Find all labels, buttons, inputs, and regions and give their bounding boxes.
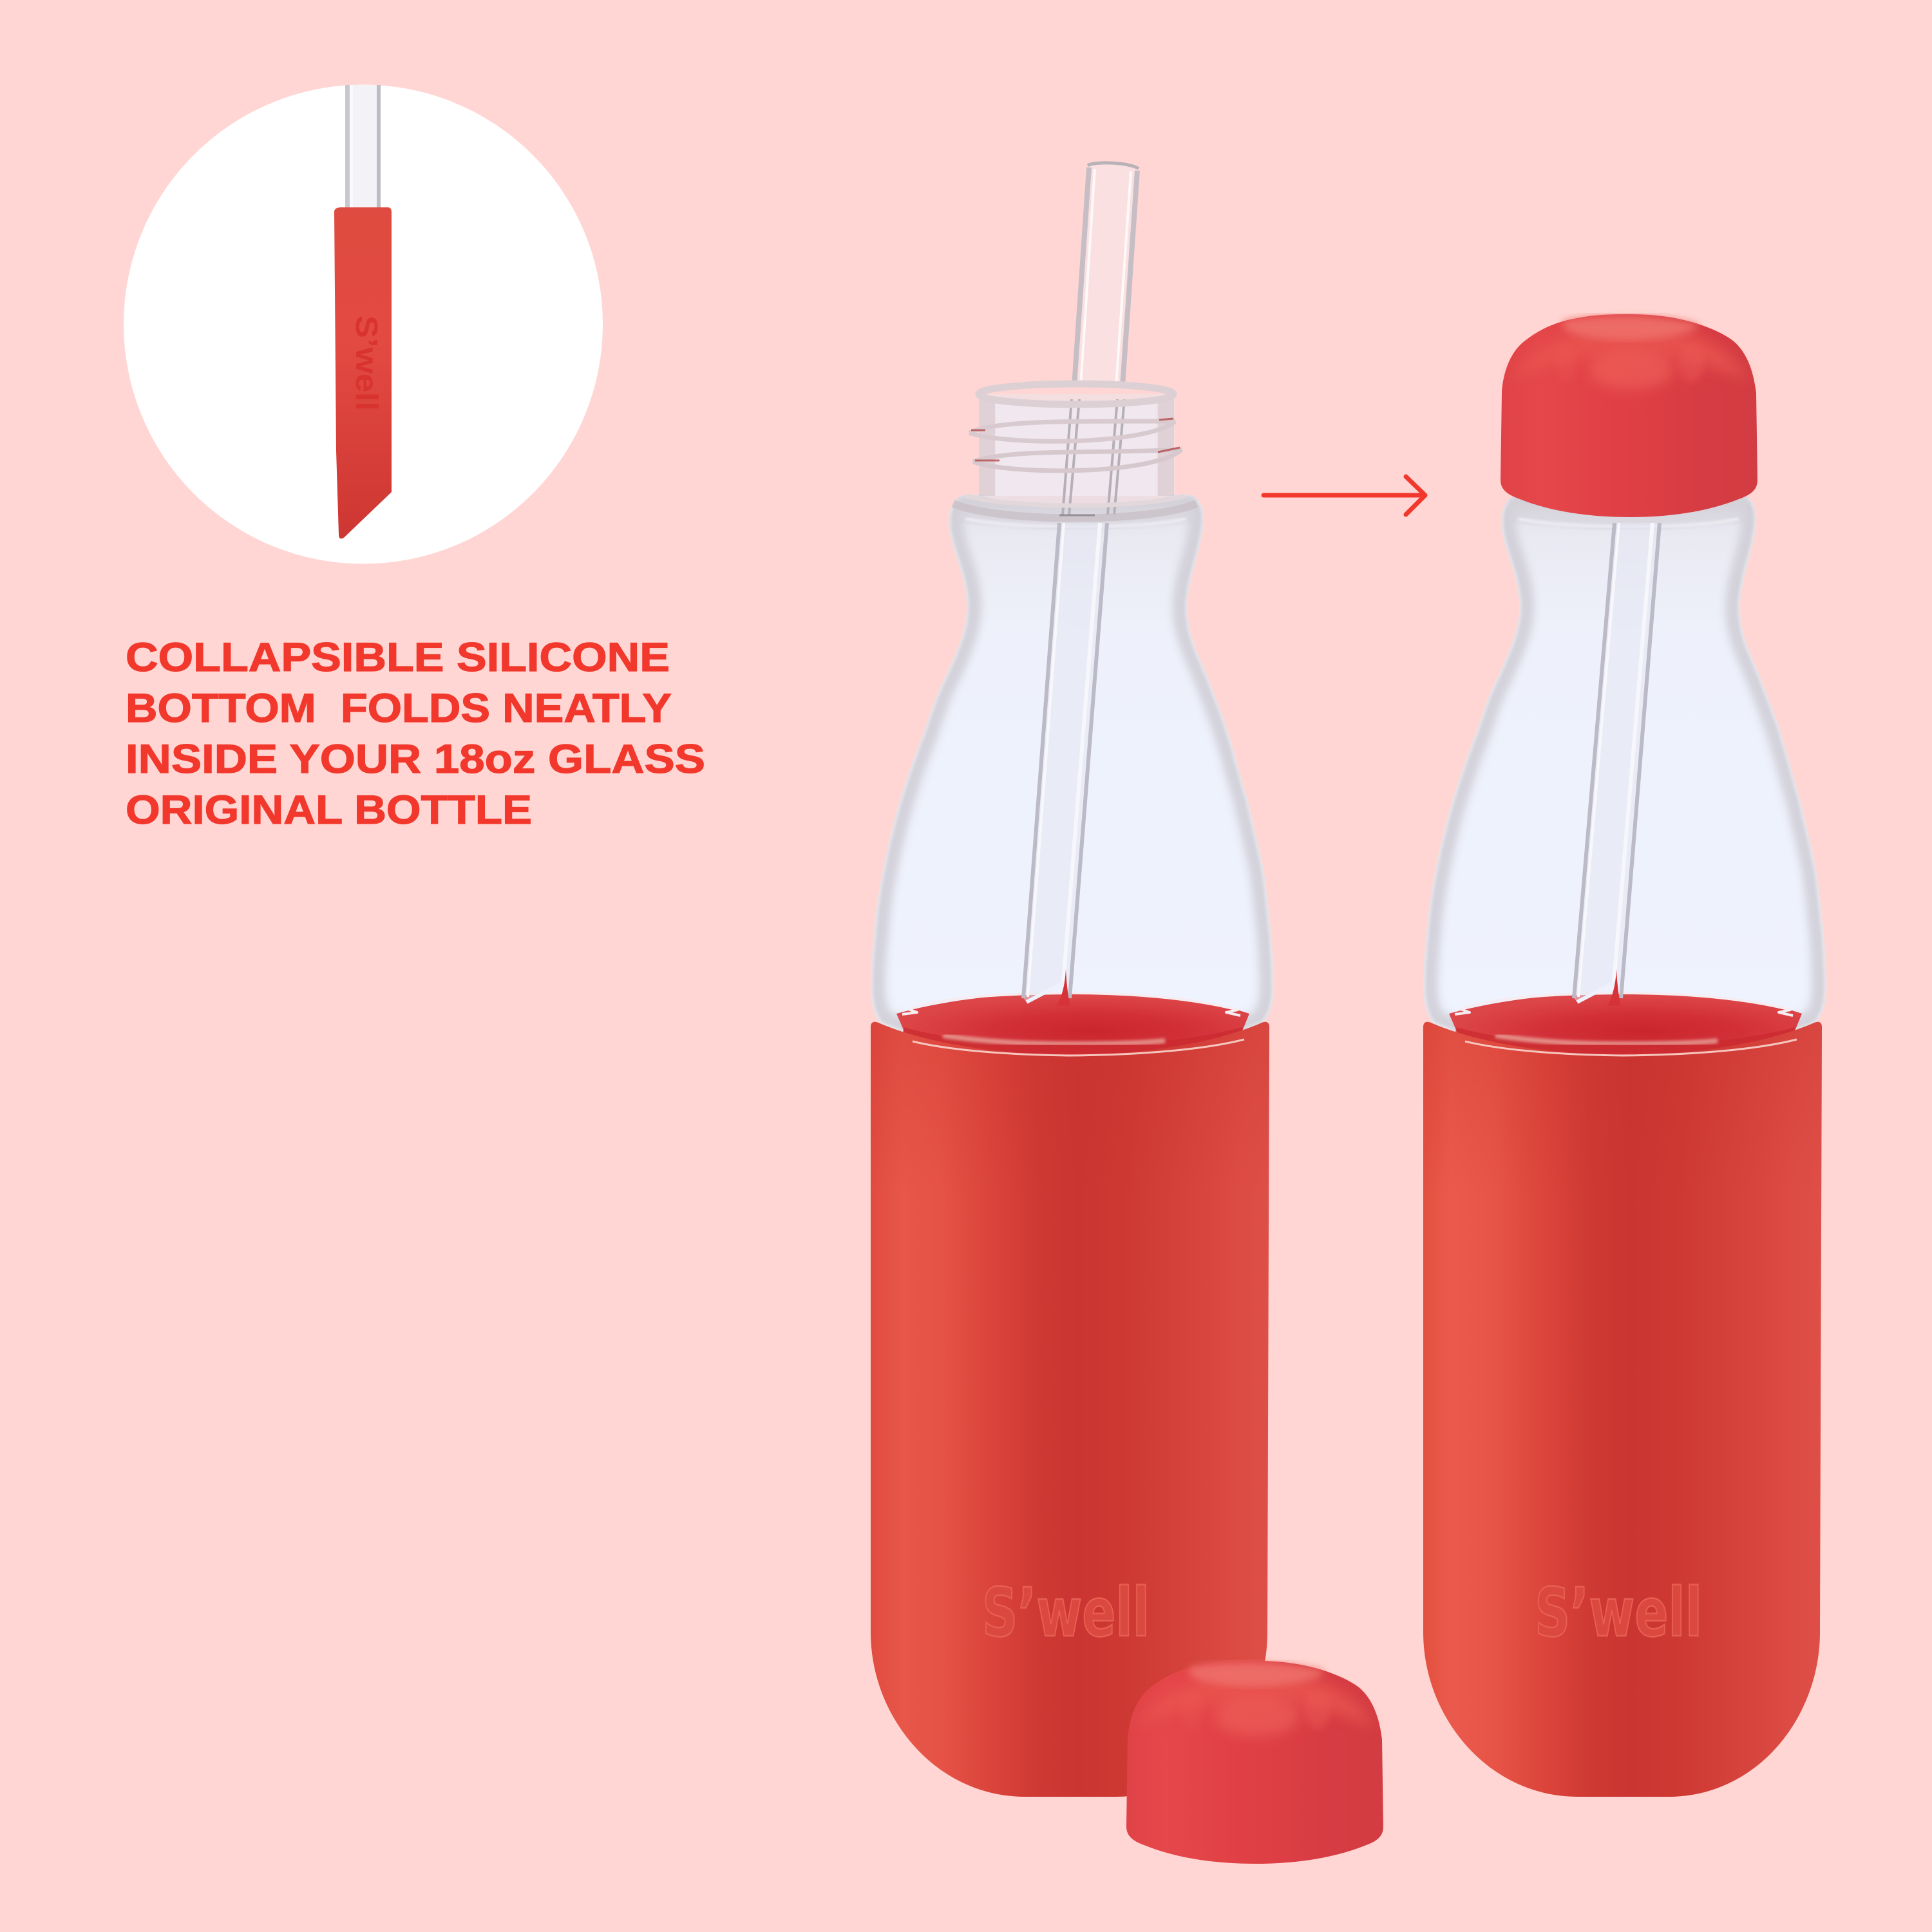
- open bottle with straw: [871, 163, 1274, 1797]
- lid on bottle: [1501, 314, 1757, 517]
- headline text: [126, 635, 705, 833]
- silicone sleeve: [871, 1022, 1269, 1797]
- silicone straw tip: S’well: [349, 316, 383, 411]
- logo on sleeve: S’well: [1535, 1573, 1702, 1652]
- straw inside closed bottle: [1574, 523, 1660, 1006]
- straw inside bottle: [1023, 523, 1107, 1006]
- logo on sleeve: S’well: [982, 1573, 1150, 1652]
- headline text: INSIDE YOUR 18oz GLASS: [126, 737, 705, 782]
- silicone sleeve: [1423, 1022, 1822, 1797]
- arrow: [1264, 477, 1425, 515]
- panel: white circle detail: [124, 85, 603, 564]
- straw above neck: [1072, 163, 1139, 386]
- loose lid: [1126, 1661, 1383, 1864]
- closed bottle with cap: [1423, 314, 1826, 1797]
- straw segment in circle: [345, 85, 381, 209]
- headline text: COLLAPSIBLE SILICONE: [126, 635, 670, 680]
- headline text: ORIGINAL BOTTLE: [126, 788, 532, 833]
- glass body: [1423, 495, 1826, 1057]
- glass body: [871, 495, 1274, 1057]
- bottle neck with threads: [953, 384, 1197, 518]
- headline text: BOTTOM FOLDS NEATLY: [126, 686, 672, 731]
- silicone straw tip: [334, 207, 392, 538]
